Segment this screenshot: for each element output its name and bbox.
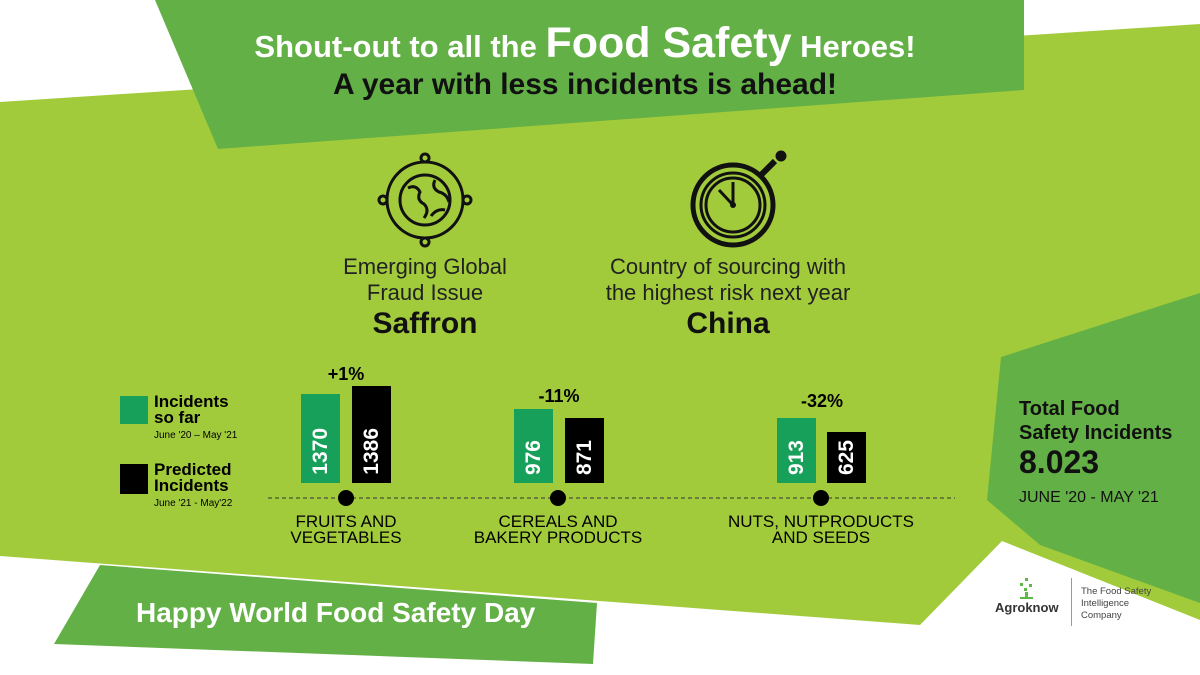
bar chart: 625 [835,440,858,475]
legend: Predicted [154,460,231,479]
legend: Incidents [154,392,229,411]
panel: total incidents [1019,398,1172,506]
bar chart: NUTS, NUTPRODUCTS [728,512,914,531]
legend: Incidents [154,476,229,495]
text: fraud issue: Saffron [372,307,478,340]
logo [995,578,1152,626]
panel: total incidents: JUNE '20 - MAY '21 [1019,489,1159,506]
icon: stopwatch [690,150,786,248]
bar chart: VEGETABLES [290,528,402,547]
bar chart: 1370 [309,428,332,475]
footer banner text: Happy World Food Safety Day [136,597,535,628]
legend [120,392,237,509]
bar chart: CEREALS AND [498,512,618,531]
bar chart: 871 [573,440,596,475]
legend: June '20 – May '21 [154,430,237,441]
bar chart: +1% [328,364,364,384]
bar chart: -32% [801,391,843,411]
text: fraud issue [343,254,507,340]
text: country risk [606,254,850,340]
legend: so far [154,408,200,427]
text: country risk: China [686,307,770,340]
bar chart: FRUITS AND [295,512,397,531]
logo: Agroknow [995,600,1059,615]
logo: The Food Safety [1081,586,1151,597]
text: country risk: Country of sourcing with [610,254,846,279]
panel: total incidents: 8.023 [1019,444,1099,480]
bar chart: AND SEEDS [772,528,870,547]
text: country risk: the highest risk next year [606,280,850,305]
legend: June '21 - May'22 [154,498,232,509]
icon: globe [378,152,472,248]
logo: Company [1081,610,1122,621]
subtitle: A year with less incidents is ahead! [333,68,837,101]
bar chart: 913 [785,440,808,475]
logo: Intelligence [1081,598,1129,609]
text: fraud issue: Emerging Global [343,254,507,279]
bar chart: -11% [538,386,580,406]
bar chart: BAKERY PRODUCTS [474,528,642,547]
panel: total incidents: Total Food [1019,398,1120,420]
panel: total incidents: Safety Incidents [1019,422,1172,444]
title: Shout-out to all the Food Safety Heroes! [254,19,916,67]
bar chart: 976 [522,440,545,475]
bar chart: 1386 [360,428,383,475]
text: fraud issue: Fraud Issue [367,280,483,305]
